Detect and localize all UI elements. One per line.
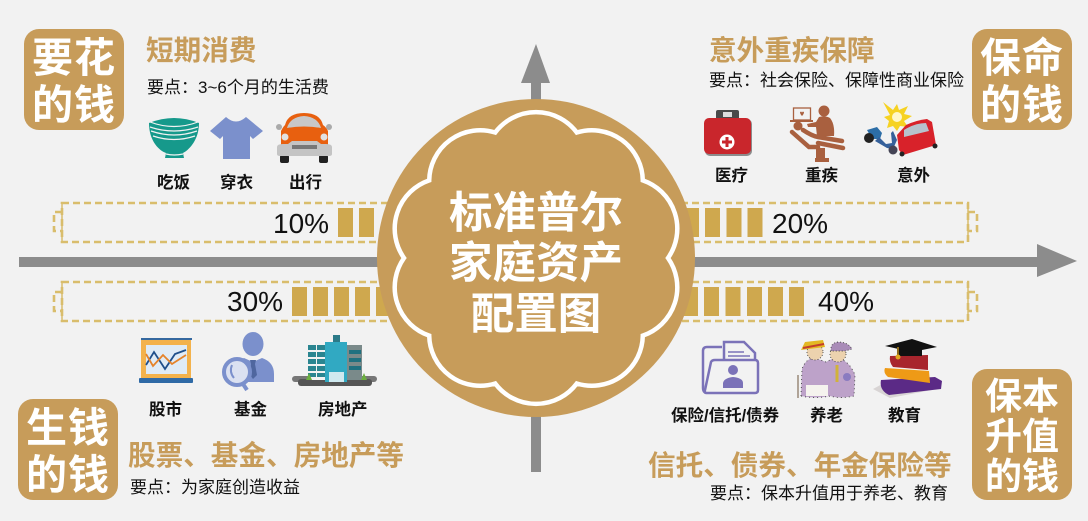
icon: shirt — [210, 117, 263, 159]
progress bar: 10%: 10% — [273, 208, 329, 239]
tag: 保本升值的钱 — [972, 369, 1072, 500]
tag: 保本升值的钱: 的钱 — [985, 456, 1059, 497]
note: 保本升值: 要点：保本升值用于养老、教育 — [710, 484, 948, 503]
label: 基金: 基金 — [234, 399, 268, 419]
tag: 生钱的钱: 生钱 — [26, 405, 110, 451]
progress bar: 20%: 20% — [772, 208, 828, 239]
label: 意外: 意外 — [897, 165, 930, 185]
note: 保障: 要点：社会保险、保障性商业保险 — [709, 71, 964, 90]
central badge: 配置图 — [471, 291, 601, 339]
label: 穿衣: 穿衣 — [220, 172, 254, 192]
tag: 保本升值的钱: 升值 — [985, 416, 1059, 457]
progress bar: 40%: 40% — [818, 286, 874, 317]
progress bar: 20% — [670, 203, 977, 242]
heading: 短期消费: 短期消费 — [146, 35, 256, 66]
tag: 要花的钱: 要花 — [32, 35, 116, 81]
tag: 要花的钱 — [24, 29, 124, 130]
icon: car — [276, 113, 332, 163]
heading: 意外重疾保障: 意外重疾保障 — [709, 35, 875, 66]
label: 股市: 股市 — [149, 399, 182, 419]
label: 养老: 养老 — [810, 405, 843, 425]
tag: 生钱的钱 — [18, 399, 118, 500]
central badge: 标准普尔 — [449, 190, 623, 238]
icon: bowl — [149, 118, 199, 158]
icon: document folder — [703, 342, 758, 393]
icon: books and graduation cap — [873, 339, 942, 398]
tag: 生钱的钱: 的钱 — [26, 452, 110, 498]
tag: 保命的钱: 保命 — [980, 35, 1064, 81]
tag: 要花的钱: 的钱 — [32, 82, 116, 128]
note: 短期消费: 要点：3~6个月的生活费 — [147, 78, 329, 97]
progress bar: 30% — [54, 282, 392, 321]
central badge — [377, 99, 695, 417]
progress bar: 30%: 30% — [227, 286, 283, 317]
icon: real estate building — [292, 335, 377, 386]
label: 房地产: 房地产 — [318, 400, 368, 419]
note: 收益: 要点：为家庭创造收益 — [130, 478, 300, 497]
icon: stock chart — [139, 338, 193, 383]
progress bar: 40% — [670, 282, 977, 321]
icon: fund analyst with magnifier — [224, 332, 274, 390]
tag: 保命的钱: 的钱 — [980, 82, 1064, 128]
label: 保险/信托/债券: 保险/信托/债券 — [671, 405, 780, 425]
label: 医疗: 医疗 — [715, 165, 748, 185]
icon: accident — [864, 102, 938, 156]
heading: 信托、债券、年金保险等: 信托、债券、年金保险等 — [648, 450, 952, 481]
label: 吃饭: 吃饭 — [157, 173, 190, 192]
tag: 保本升值的钱: 保本 — [985, 376, 1059, 417]
label: 出行: 出行 — [289, 173, 322, 192]
vertical axis arrow — [521, 44, 550, 472]
progress bar: 10% — [54, 203, 392, 242]
heading: 股票、基金、房地产等: 股票、基金、房地产等 — [128, 440, 404, 471]
horizontal axis arrow — [19, 244, 1077, 277]
icon: elderly couple — [798, 340, 855, 398]
icon: doctor and patient — [790, 106, 843, 162]
tag: 保命的钱 — [972, 29, 1072, 130]
label: 重疾: 重疾 — [805, 165, 838, 185]
label: 教育: 教育 — [888, 405, 921, 425]
central badge: 家庭资产 — [449, 240, 623, 288]
icon: medical kit — [704, 110, 752, 156]
